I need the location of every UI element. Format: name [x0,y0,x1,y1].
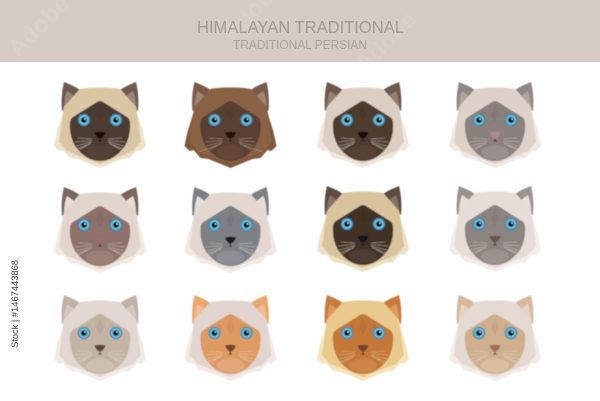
header band [0,0,600,62]
cat 9: cream lynx [54,295,146,381]
cat 8: lilac point [449,186,541,272]
cat 5: chocolate point [54,187,146,273]
subtitle: TRADITIONAL PERSIAN [233,38,367,52]
cat 12: cream point [449,295,541,381]
cat 4: blue point [449,82,541,168]
cat 6: grey blue point [184,187,276,273]
watermark [3,0,422,78]
title: HIMALAYAN TRADITIONAL [197,17,404,37]
cat 3: seal point on pale [317,82,409,168]
cat 1: seal point on cream [54,82,146,168]
stock number: Stock | #1467443868 [10,260,21,348]
cat 7: seal point on tan [317,186,409,272]
cat 10: flame point [184,295,276,381]
cat 2: dark brown [184,82,276,168]
cat 11: red on golden [317,295,409,381]
watermark: Adobe [350,6,422,78]
